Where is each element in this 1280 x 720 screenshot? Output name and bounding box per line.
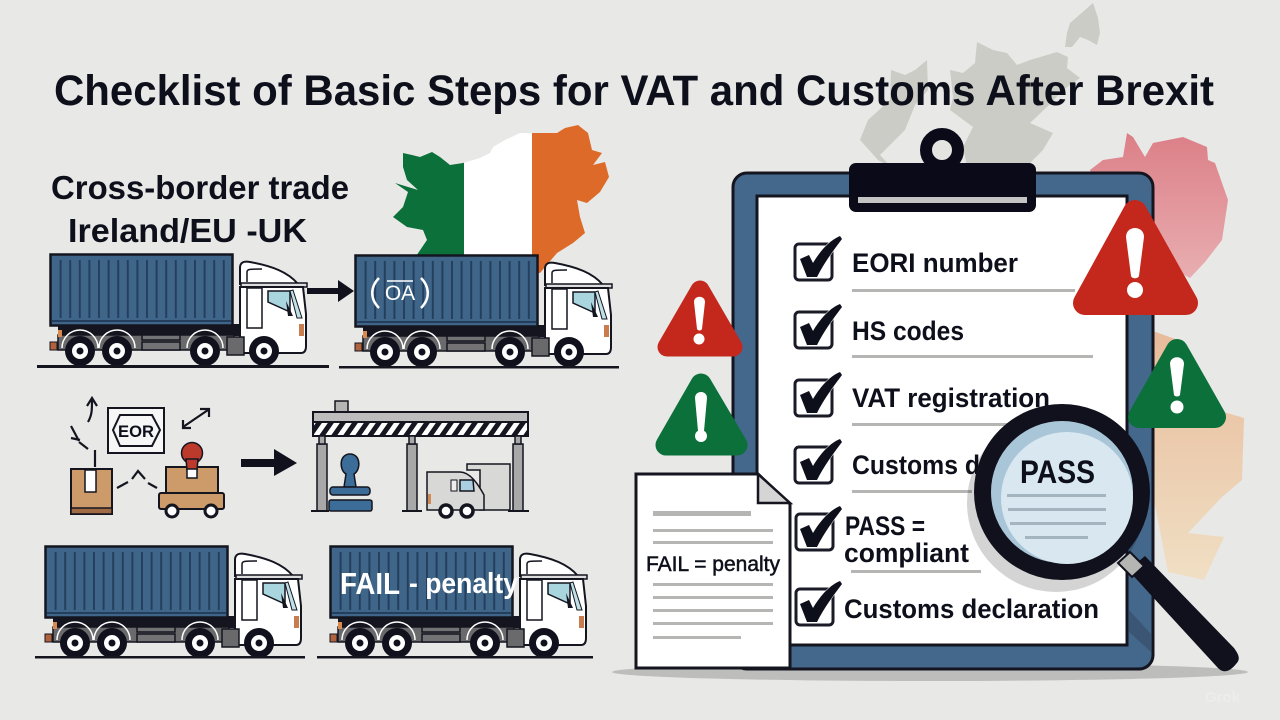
checklist item: VAT registration: VAT registration — [852, 383, 1050, 413]
warning: left green — [666, 384, 737, 445]
icon: EOR label: EOR — [118, 422, 154, 441]
checklist item: VAT registration — [795, 372, 1050, 416]
checklist item: EORI number: EORI number — [852, 248, 1018, 278]
arrow: parcels to customs gate — [241, 449, 297, 476]
clipboard — [733, 134, 1153, 669]
checklist item: HS codes: HS codes — [852, 316, 964, 346]
lens rules — [1007, 494, 1106, 539]
checklist rules — [851, 289, 1093, 573]
truck: bottom right with penalty text — [330, 546, 587, 658]
subheading: cross-border trade: Ireland/EU -UK — [68, 212, 307, 249]
map: Ireland flag — [390, 120, 612, 280]
checklist item: Customs d — [795, 439, 980, 483]
faded map: northern England — [1090, 133, 1228, 278]
subheading: cross-border trade — [51, 169, 349, 249]
checklist item: PASS = compliant — [796, 506, 969, 568]
ground line: top left — [37, 365, 329, 368]
checklist item: Customs declaration: Customs declaration — [844, 594, 1099, 624]
checklist item: EORI number — [795, 236, 1018, 280]
truck: top right with OA mark: OA — [385, 282, 415, 305]
handle shadow on clipboard — [1129, 610, 1151, 652]
icon: blue customs stamp — [329, 454, 372, 511]
ground shadow — [612, 663, 1248, 681]
truck: top right with OA mark — [355, 256, 612, 367]
checklist item: Customs declaration — [796, 581, 1099, 625]
icon: parcel on cart with red stamp — [159, 442, 224, 517]
checklist item: PASS = compliant: compliant — [844, 538, 969, 568]
truck: bottom right with penalty text: - penalty — [409, 568, 518, 600]
ground line: top right — [339, 366, 619, 368]
clipboard clip — [849, 134, 1036, 212]
ground line: bottom right — [317, 656, 593, 658]
arrow: truck to truck — [307, 280, 354, 302]
icon: EOR label — [108, 408, 164, 453]
document: FAIL = penalty: FAIL = penalty — [646, 553, 780, 576]
icon: parcel — [71, 469, 112, 514]
document: FAIL = penalty — [636, 474, 790, 668]
checklist item: PASS = compliant: PASS = — [845, 511, 925, 541]
icon: delivery van — [427, 464, 510, 517]
lens text: PASS: PASS — [1020, 454, 1095, 490]
checklist item: Customs d: Customs d — [852, 450, 980, 480]
customs gate — [311, 401, 529, 511]
subheading: cross-border trade: Cross-border trade — [51, 169, 349, 206]
truck: bottom right with penalty text: FAIL — [340, 566, 400, 601]
icon: dashed arrows around parcel — [71, 398, 209, 488]
warning: large red — [1085, 212, 1186, 303]
ground line: bottom left — [35, 656, 305, 658]
magnifier — [967, 412, 1239, 671]
watermark: Grok — [1205, 689, 1241, 706]
faded map: Scotland — [860, 3, 1100, 168]
truck: top left — [50, 254, 307, 366]
truck: bottom left — [45, 546, 302, 658]
warning: right green — [1139, 350, 1215, 417]
title: Checklist of Basic Steps for VAT and Customs After Brexit — [54, 67, 1214, 115]
faded map: southern England — [1148, 330, 1244, 580]
checklist item: HS codes — [795, 304, 964, 348]
warning: small red — [667, 290, 733, 347]
